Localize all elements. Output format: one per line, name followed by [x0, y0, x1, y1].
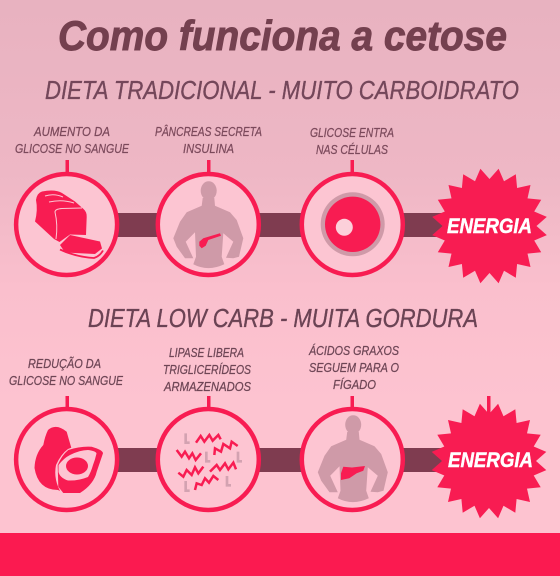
circle [16, 174, 117, 275]
stem [66, 160, 69, 173]
caption: pancreas secreta insulina [155, 124, 262, 156]
caption: reducao da glicose no sangue: GLICOSE NO SANGUE [9, 374, 124, 388]
caption: glicose entra nas celulas: NAS CÉLULAS [316, 142, 389, 157]
caption: aumento da glicose no sangue: AUMENTO DA [33, 125, 110, 139]
caption: acidos graxos seguem para o figado: FÍGADO [333, 377, 376, 392]
step: acidos graxos figado [302, 343, 403, 510]
stem [207, 396, 210, 408]
starburst [432, 404, 546, 518]
caption: lipase libera trigliceridos armazenados: TRIGLICERÍDEOS [163, 362, 252, 377]
caption: aumento da glicose no sangue: GLICOSE NO SANGUE [15, 142, 130, 156]
label: energia: ENERGIA [447, 215, 532, 238]
circle [302, 409, 403, 510]
caption: acidos graxos seguem para o figado: SEGUEM PARA O [309, 361, 399, 375]
footer band [0, 533, 560, 576]
caption: reducao da glicose no sangue: REDUÇÃO DA [28, 357, 101, 371]
step: glicose entra nas celulas [302, 126, 403, 275]
circle [158, 409, 259, 510]
caption: lipase libera trigliceridos armazenados [163, 346, 252, 394]
step: aumento da glicose [15, 125, 130, 275]
caption: glicose entra nas celulas [310, 126, 394, 157]
icon: liver [341, 466, 365, 480]
step: reducao da glicose [9, 357, 124, 510]
connector bar: top row [115, 213, 450, 237]
caption: pancreas secreta insulina: INSULINA [183, 142, 234, 156]
caption: acidos graxos seguem para o figado [308, 343, 400, 392]
circle [302, 174, 403, 275]
circle [16, 409, 117, 510]
icon: torso silhouette [173, 181, 243, 268]
step: pancreas secreta insulina [155, 124, 262, 275]
circle [158, 174, 259, 275]
icon: bread [35, 191, 103, 258]
flow row: dieta tradicional [15, 124, 547, 283]
connector bar: bottom row [115, 448, 450, 472]
icon: pancreas [199, 233, 221, 248]
label: energia: ENERGIA [448, 449, 533, 472]
flow row: dieta low carb [9, 343, 546, 518]
icon: cell [321, 192, 385, 256]
starburst [432, 169, 547, 283]
caption: lipase libera trigliceridos armazenados: ARMAZENADOS [163, 380, 252, 394]
caption: acidos graxos seguem para o figado: ÁCIDOS GRAXOS [308, 343, 400, 358]
badge: energia bottom [432, 396, 546, 518]
title: Como funciona a cetose [58, 12, 507, 59]
icon: torso silhouette [318, 415, 388, 502]
caption: reducao da glicose no sangue [9, 357, 124, 388]
caption: pancreas secreta insulina: PÂNCREAS SECRETA [155, 124, 262, 139]
stem [487, 396, 490, 416]
caption: lipase libera trigliceridos armazenados: LIPASE LIBERA [169, 346, 244, 360]
caption: aumento da glicose no sangue [15, 125, 130, 156]
heading: dieta low carb: DIETA LOW CARB - MUITA GORDURA [88, 303, 478, 333]
stem [207, 160, 210, 173]
caption: glicose entra nas celulas: GLICOSE ENTRA [310, 126, 394, 140]
icon: avocado [34, 427, 105, 494]
stem [66, 396, 69, 408]
stem [350, 396, 354, 408]
step: lipase libera trigliceridos [158, 346, 259, 510]
icon: triglyceride chains [177, 433, 242, 491]
badge: energia top [432, 169, 547, 283]
stem [350, 160, 354, 173]
